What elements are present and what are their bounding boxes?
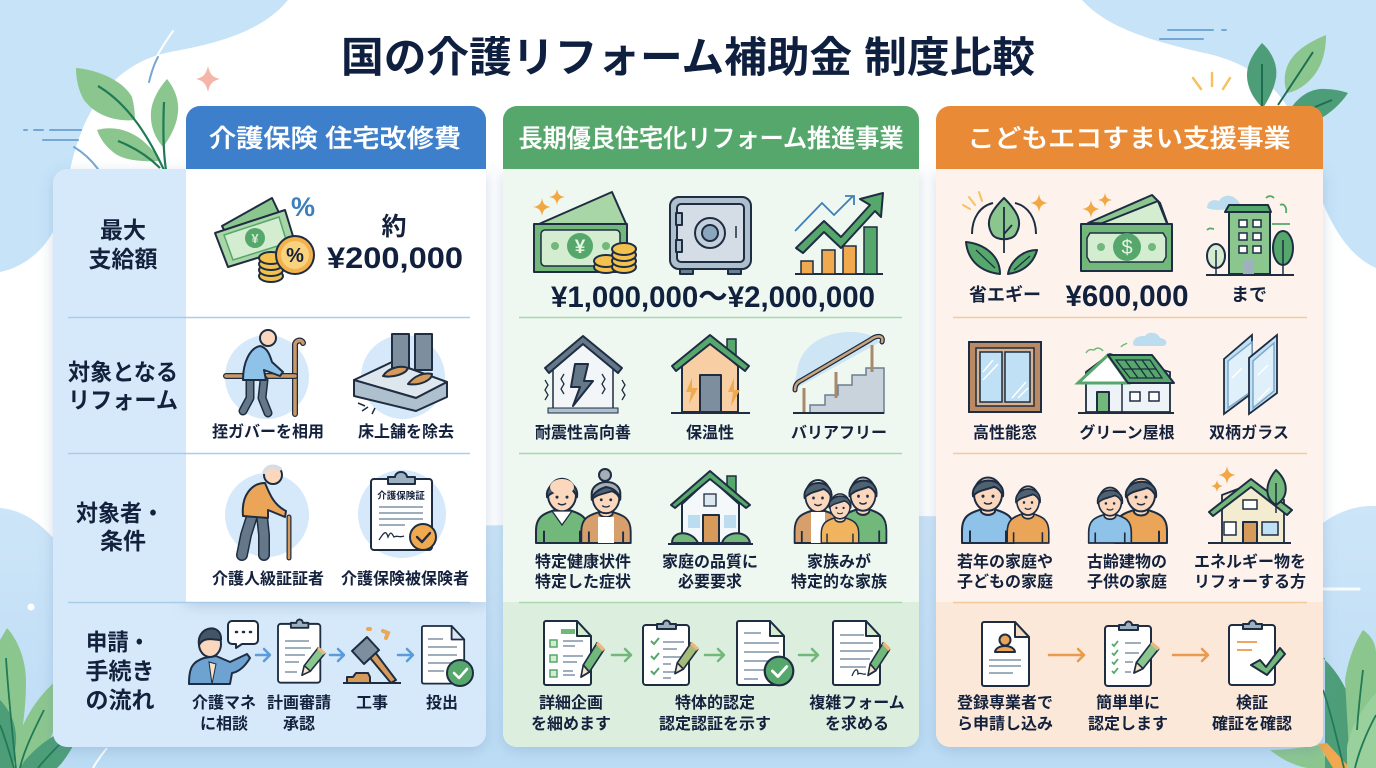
icon: bills and coins: ¥	[575, 237, 586, 258]
icon: submission document	[422, 626, 473, 686]
icon: detailed plan form	[544, 621, 604, 685]
icon: bills and coins: %	[286, 245, 304, 267]
panel body	[503, 169, 919, 747]
arrow	[398, 649, 413, 661]
label: 投出: 投出	[426, 693, 458, 712]
label: 耐震性高向善: 耐震性高向善	[535, 423, 631, 442]
icon: dollar bills	[1081, 193, 1172, 271]
header label: 介護保険 住宅改修費	[209, 125, 461, 153]
icon: checklist clipboard	[643, 620, 698, 685]
label: 家庭の品質に必要要求: 家庭の品質に	[662, 552, 758, 571]
label: 家庭の品質に必要要求: 必要要求	[678, 572, 742, 591]
icon: applicant document	[982, 622, 1029, 686]
label: グリーン屋根: グリーン屋根	[1079, 423, 1175, 442]
steps band	[503, 602, 919, 747]
amount: 約¥200,000: 約	[381, 213, 407, 241]
icon: bills and coins	[533, 189, 636, 273]
amount: 約¥200,000	[327, 213, 463, 275]
panel redraw: row header column	[120, 169, 186, 602]
row label: 申請・手続きの流れ	[86, 629, 154, 713]
label: 古齢建物の子供の家庭: 古齢建物の	[1087, 553, 1167, 571]
icon: high-performance window	[969, 342, 1041, 412]
icon: elderly with cane	[225, 466, 309, 558]
label: 簡単単に認定します: 簡単単に	[1096, 693, 1160, 712]
icon: earthquake-resistant house	[545, 336, 625, 413]
row label: 対象者・条件	[76, 500, 164, 554]
label: まで: まで	[1231, 285, 1267, 305]
label: 複雑フォームを求める	[809, 693, 905, 733]
label: 簡単単に認定します: 認定します	[1088, 715, 1168, 733]
label: 介護マネに相談	[192, 694, 256, 733]
row label: 申請・手続きの流れ: の流れ	[86, 687, 154, 713]
icon: green building	[1206, 196, 1294, 275]
label: 床上舗を除去: 床上舗を除去	[358, 422, 454, 441]
icon: bills and coins: ¥	[251, 231, 259, 246]
label: 特定健康状件特定した症状: 特定健康状件	[535, 552, 631, 571]
arrow	[612, 649, 631, 661]
label: 介護マネに相談: に相談	[200, 715, 248, 733]
label: 計画審請承認: 計画審請	[267, 694, 331, 712]
decorative sparkle and dashes: top left	[24, 31, 220, 169]
background blob: top right	[1082, 0, 1376, 268]
label: 省エギー: 省エギー	[969, 285, 1041, 305]
decorative dashes: top right	[1160, 30, 1226, 39]
leaves: bottom right	[1270, 589, 1376, 768]
amount: ¥600,000: ¥600,000	[1066, 280, 1188, 313]
panel header	[936, 106, 1323, 169]
panel header	[186, 106, 486, 169]
header label: こどもエコすまい支援事業	[968, 125, 1290, 153]
panel header	[503, 106, 919, 169]
label: 保温性: 保温性	[686, 423, 734, 442]
icon: elderly couple	[536, 469, 631, 543]
row label: 対象となるリフォーム: 対象となる	[68, 359, 178, 385]
label: 簡単単に認定します	[1088, 693, 1168, 733]
panel background: row header column and steps band	[53, 169, 486, 747]
icon: care manager consultation	[189, 621, 258, 684]
label: 登録専業者でら申請し込み: ら申請し込み	[957, 715, 1053, 733]
label: 古齢建物の子供の家庭: 子供の家庭	[1087, 572, 1167, 591]
label: 古齢建物の子供の家庭	[1087, 553, 1167, 591]
label: 複雑フォームを求める: 複雑フォーム	[809, 693, 905, 712]
title: 国の介護リフォーム補助金 制度比較	[341, 34, 1035, 81]
icon: insulated house	[671, 335, 750, 413]
background band: bottom	[0, 506, 1376, 768]
icon: floor step removal	[354, 334, 447, 419]
icon: gavel	[343, 629, 401, 683]
label: 家族みが特定的な家族	[791, 552, 887, 591]
label: 若年の家庭や子どもの家庭	[957, 552, 1053, 591]
icon: green roof house	[1078, 333, 1174, 413]
label: 計画審請承認: 承認	[283, 715, 315, 733]
row label: 最大支給額: 支給額	[88, 246, 158, 272]
row label: 対象となるリフォーム: リフォーム	[68, 387, 178, 413]
leaves: top right	[1247, 35, 1348, 119]
icon: verification clipboard	[1229, 620, 1285, 685]
icon: energy saving leaves	[963, 192, 1048, 274]
icon: signed form	[833, 621, 890, 685]
label: 特体的認定認定認証を示す: 特体的認定	[675, 693, 755, 712]
row label: 最大支給額: 最大	[100, 217, 146, 243]
panel body	[936, 169, 1323, 747]
row label: 申請・手続きの流れ: 手続き	[86, 658, 154, 684]
label: 家族みが特定的な家族: 家族みが	[807, 552, 871, 571]
label: エネルギー物をリフォーする方: リフォーする方	[1194, 572, 1306, 591]
label: 検証確証を確認: 確証を確認	[1212, 714, 1292, 733]
row dividers	[953, 318, 1307, 602]
background blob: top left	[0, 0, 288, 272]
row label: 最大支給額	[88, 217, 158, 272]
label: 詳細企画を細めます	[531, 693, 611, 733]
label: 登録専業者でら申請し込み: 登録専業者で	[957, 693, 1053, 712]
row dividers	[68, 318, 470, 602]
label: 挃ガバーを相用: 挃ガバーを相用	[212, 423, 324, 441]
icon: energy house	[1208, 466, 1292, 543]
label: 工事: 工事	[356, 693, 388, 712]
steps band	[936, 602, 1323, 747]
arrow	[1173, 649, 1208, 661]
label: バリアフリー: バリアフリー	[791, 425, 887, 442]
label: 複雑フォームを求める: を求める	[825, 714, 889, 733]
icon: double glazing	[1224, 335, 1277, 414]
label: 検証確証を確認: 検証	[1236, 693, 1268, 712]
icon: checklist clipboard	[1105, 622, 1159, 686]
label: エネルギー物をリフォーする方: エネルギー物を	[1194, 553, 1306, 571]
label: 特体的認定認定認証を示す: 認定認証を示す	[659, 715, 771, 733]
leaves: top left	[76, 68, 178, 170]
icon: bills and coins	[215, 192, 315, 282]
label: 介護保険被保険者: 介護保険被保険者	[341, 570, 469, 588]
panel: 介護保険 住宅改修費	[53, 106, 486, 747]
header label: 長期優良住宅化リフォーム推進事業	[518, 125, 904, 153]
icon: plan clipboard	[278, 619, 325, 683]
row dividers	[519, 318, 902, 602]
label: 詳細企画を細めます: 詳細企画	[539, 693, 603, 712]
icon: insurance certificate	[358, 470, 446, 558]
amount: 約¥200,000: ¥200,000	[327, 242, 463, 275]
label: 若年の家庭や子どもの家庭: 子どもの家庭	[957, 572, 1053, 591]
label: 特体的認定認定認証を示す	[659, 693, 771, 733]
label: 登録専業者でら申請し込み	[957, 693, 1053, 733]
label: 詳細企画を細めます: を細めます	[531, 715, 611, 733]
panel: 長期優良住宅化リフォーム推進事業	[503, 106, 919, 747]
row label: 対象者・条件: 条件	[100, 528, 146, 554]
icon: certification document	[737, 621, 793, 685]
arrow	[256, 649, 270, 661]
label: 高性能窓: 高性能窓	[973, 423, 1037, 442]
arrow	[799, 649, 818, 661]
icon: handrail user	[225, 330, 309, 419]
label: 検証確証を確認	[1212, 693, 1292, 733]
arrow	[705, 649, 724, 661]
icon: barrier-free stairs	[793, 332, 884, 413]
label: 計画審請承認	[267, 694, 331, 733]
label: エネルギー物をリフォーする方	[1194, 553, 1306, 591]
icon: insurance certificate: 介護保険証	[377, 490, 425, 502]
icon: quality house	[668, 471, 753, 544]
icon: family	[795, 477, 886, 543]
label: 若年の家庭や子どもの家庭: 若年の家庭や	[957, 552, 1053, 571]
label: 特定健康状件特定した症状: 特定した症状	[535, 572, 631, 591]
label: 家庭の品質に必要要求	[662, 552, 758, 591]
icon: safe	[670, 197, 751, 274]
arrow	[1049, 649, 1084, 661]
label: 双柄ガラス: 双柄ガラス	[1209, 424, 1289, 442]
icon: parent and child	[1089, 479, 1167, 543]
label: 介護人級証証者: 介護人級証証者	[212, 570, 324, 588]
label: 介護マネに相談: 介護マネ	[192, 694, 256, 712]
decorative sun rays: top right	[1193, 73, 1230, 89]
label: 家族みが特定的な家族: 特定的な家族	[791, 572, 887, 591]
row label: 対象者・条件: 対象者・	[76, 500, 164, 526]
label: 特定健康状件特定した症状	[535, 552, 631, 591]
row label: 対象となるリフォーム	[68, 359, 178, 413]
amount: ¥1,000,000～¥2,000,000: ¥1,000,000～¥2,000,000	[551, 281, 875, 314]
leaves: bottom left	[0, 604, 107, 768]
icon: young couple	[962, 477, 1049, 543]
panel: こどもエコすまい支援事業	[936, 106, 1323, 747]
icon: bills and coins: %	[291, 192, 315, 222]
icon: growth chart	[795, 193, 883, 274]
icon: dollar bills: $	[1121, 237, 1133, 259]
row label: 申請・手続きの流れ: 申請・	[86, 629, 150, 655]
arrow	[330, 649, 344, 661]
panel body: white area	[186, 169, 486, 602]
